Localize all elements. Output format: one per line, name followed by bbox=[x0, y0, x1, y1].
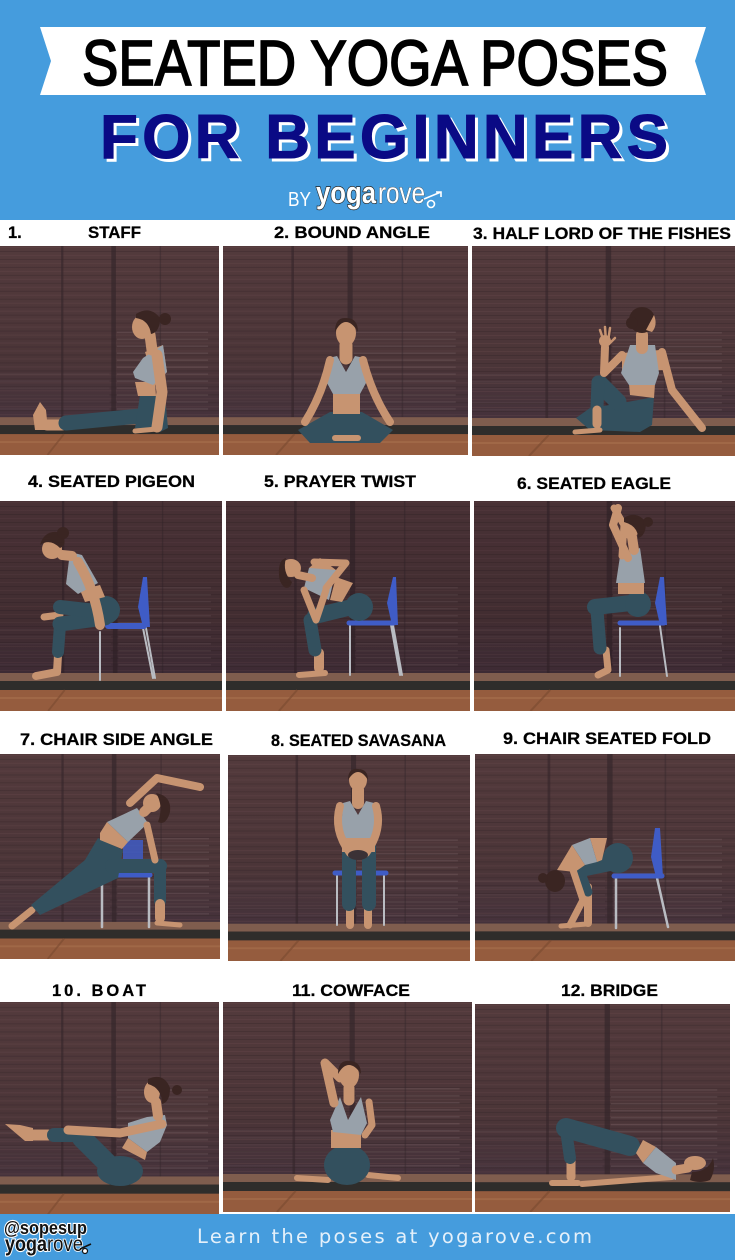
figure: chair side angle pose bbox=[12, 778, 200, 926]
panel: 12 bridge bbox=[475, 982, 730, 1212]
chair bbox=[620, 577, 667, 676]
byline logo: BY bbox=[288, 189, 311, 211]
label: bridge: 12. BRIDGE bbox=[561, 982, 658, 1000]
chair bbox=[102, 840, 150, 927]
panel: 8 seated savasana bbox=[228, 732, 470, 961]
panel: 6 seated eagle bbox=[474, 475, 735, 711]
byline logo bbox=[288, 175, 441, 211]
footer band bbox=[0, 1214, 735, 1260]
figure: staff pose bbox=[33, 310, 171, 432]
title banner bbox=[40, 27, 706, 99]
label: staff: STAFF bbox=[88, 224, 141, 242]
label: seated savasana: 8. SEATED SAVASANA bbox=[271, 732, 446, 750]
label: staff: 1. bbox=[8, 224, 22, 242]
figure: chair seated fold pose bbox=[538, 838, 633, 926]
byline logo: rove bbox=[378, 177, 425, 210]
figure: seated eagle pose bbox=[595, 508, 653, 675]
panel: 11 cowface bbox=[223, 982, 472, 1212]
panel: 3 half lord of the fishes bbox=[472, 225, 735, 456]
label: half lord of the fishes: 3. HALF LORD OF THE FISHES bbox=[473, 225, 731, 243]
figure: seated savasana pose bbox=[338, 769, 378, 925]
label: cowface: 11. COWFACE bbox=[292, 982, 410, 1000]
figure: bridge pose bbox=[552, 1128, 714, 1184]
panel: 1 staff bbox=[0, 224, 219, 455]
footer logo: yoga bbox=[5, 1233, 47, 1256]
label: chair seated fold: 9. CHAIR SEATED FOLD bbox=[503, 730, 711, 748]
figure: half lord of the fishes pose bbox=[575, 307, 702, 432]
panel: 2 bound angle bbox=[223, 224, 468, 455]
byline logo: yoga bbox=[316, 175, 377, 210]
chair bbox=[335, 873, 386, 925]
header band bbox=[0, 0, 735, 220]
figure: boat pose bbox=[5, 1077, 182, 1186]
subtitle: for beginners: FOR BEGINNERS bbox=[103, 106, 671, 175]
panel: 10 boat bbox=[0, 982, 219, 1215]
panel: 7 chair side angle bbox=[0, 731, 220, 959]
chair bbox=[614, 828, 668, 928]
figure: seated pigeon pose bbox=[36, 527, 120, 676]
panel: 4 seated pigeon bbox=[0, 473, 222, 711]
panel: 9 chair seated fold bbox=[475, 730, 735, 961]
label: boat: 10. BOAT bbox=[52, 982, 146, 1000]
footer logo bbox=[4, 1218, 91, 1256]
label: seated eagle: 6. SEATED EAGLE bbox=[517, 475, 671, 493]
label: seated pigeon: 4. SEATED PIGEON bbox=[28, 473, 195, 491]
footer logo: @sopesup bbox=[4, 1218, 87, 1238]
figure: cowface pose bbox=[297, 1061, 398, 1185]
footer call to action: Learn the poses at yogarove.com bbox=[197, 1225, 592, 1248]
subtitle: for beginners: FOR BEGINNERS bbox=[100, 103, 668, 172]
chair bbox=[349, 577, 402, 675]
footer logo: rove bbox=[47, 1233, 83, 1256]
label: chair side angle: 7. CHAIR SIDE ANGLE bbox=[20, 731, 213, 749]
chair bbox=[100, 577, 155, 680]
figure: bound angle pose bbox=[298, 318, 393, 443]
label: staff bbox=[8, 224, 141, 242]
label: prayer twist: 5. PRAYER TWIST bbox=[264, 473, 416, 491]
label: bound angle: 2. BOUND ANGLE bbox=[274, 224, 430, 242]
figure: prayer twist pose bbox=[279, 558, 373, 675]
panel: 5 prayer twist bbox=[226, 473, 470, 711]
